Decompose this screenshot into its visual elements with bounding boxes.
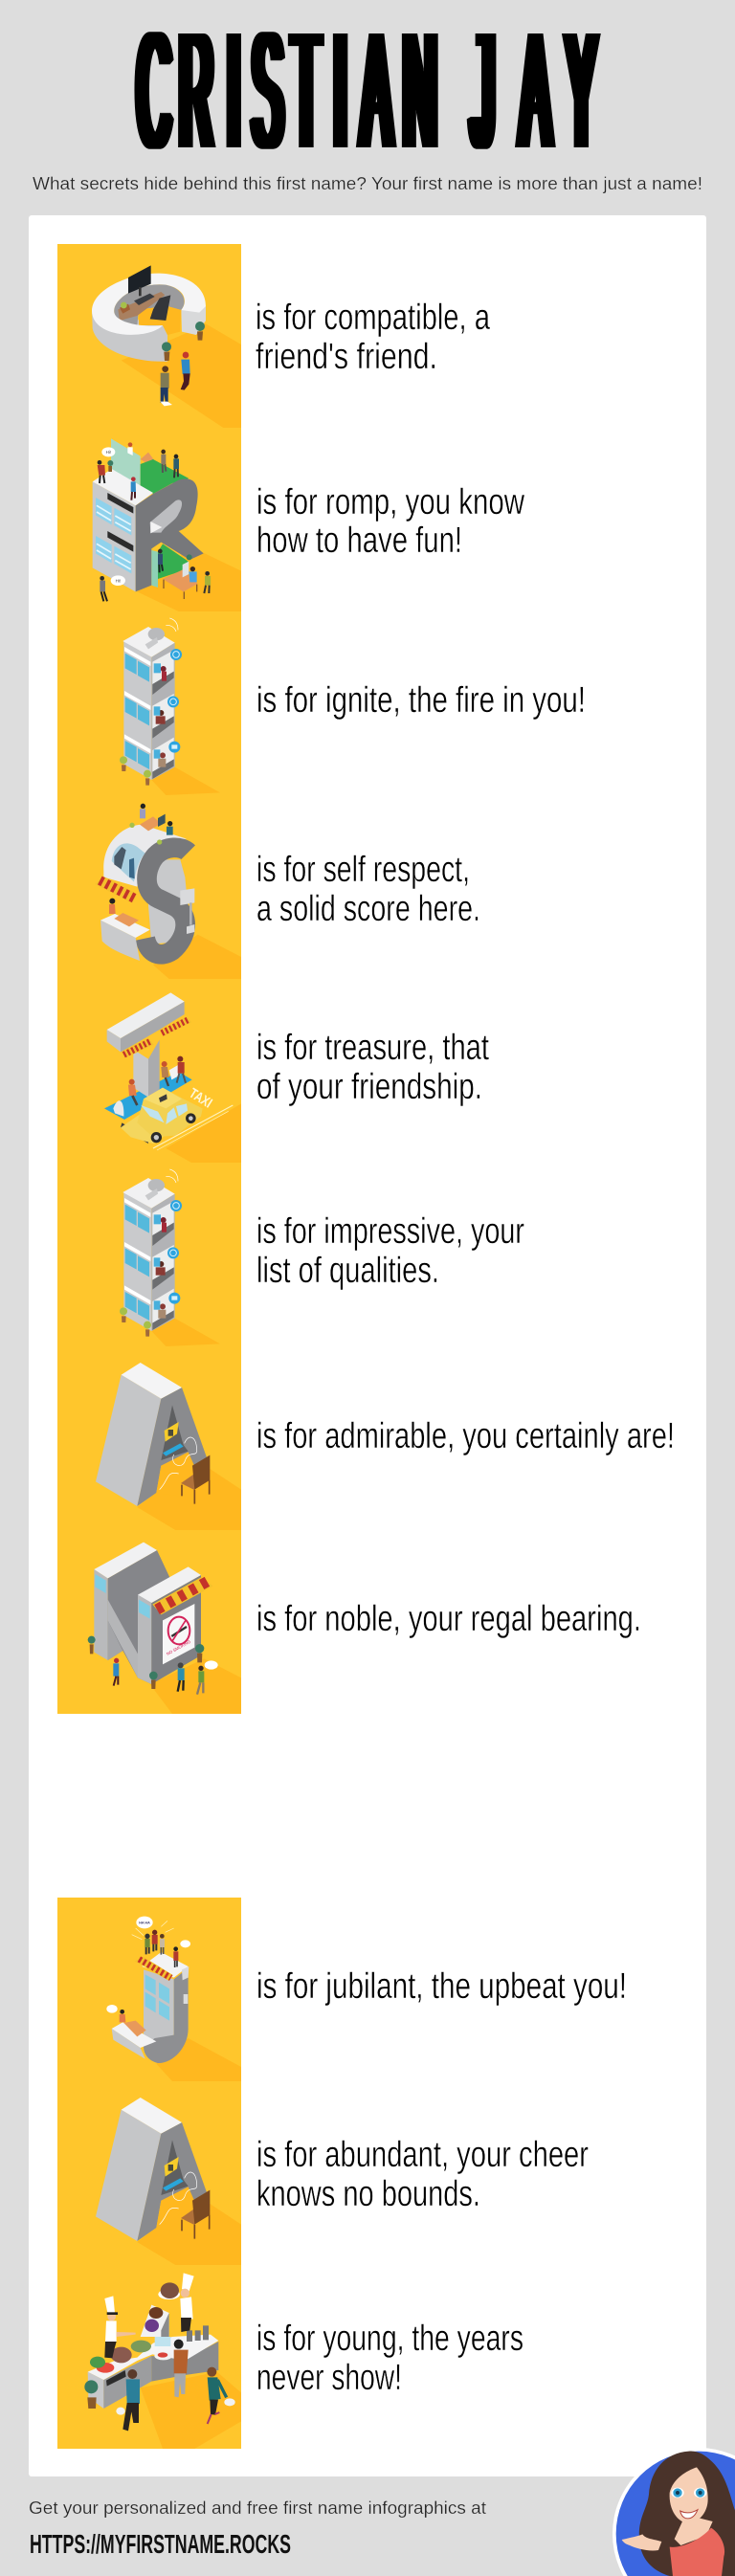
footer call to action: Get your personalized and free first name infographics at (29, 2498, 486, 2518)
text: I second line (256, 1211, 524, 1291)
text: T line: of your friendship. (256, 1067, 482, 1107)
text: A second line (256, 2135, 589, 2214)
illustration: letter J (57, 1898, 241, 2081)
text: I second line: is for impressive, your (256, 1211, 524, 1252)
text: S line: a solid score here. (256, 889, 480, 929)
text: A second line: knows no bounds. (256, 2174, 480, 2214)
text: A second line: is for abundant, your cheer (256, 2135, 589, 2175)
text: T line: is for treasure, that (256, 1028, 489, 1068)
text: C line: is for compatible, a (256, 298, 491, 338)
text: R line: is for romp, you know (256, 482, 524, 522)
text: Y line: is for young, the years (256, 2319, 523, 2359)
illustration: letter J: HA HA (139, 1921, 150, 1924)
text: Y line (256, 2319, 523, 2398)
illustration: letter Y (57, 2265, 241, 2449)
text: Y line: never show! (256, 2358, 402, 2398)
text: R line: how to have fun! (256, 521, 462, 561)
text: S line (256, 850, 480, 929)
illustration: letter R: Hi! (116, 578, 121, 583)
illustration: letter R (57, 428, 241, 611)
illustration: letter N: NO SMOKING (166, 1639, 192, 1656)
illustration: letter T: TAXI (187, 1085, 215, 1111)
text: R line (256, 482, 524, 561)
illustration: letter R: Hi! (106, 450, 111, 455)
illustration: letter A (57, 1346, 241, 1530)
illustration: letter I (second) (57, 1163, 241, 1346)
illustration: letter S (57, 795, 241, 979)
title: CRISTIAN JAY (138, 0, 596, 183)
illustration: letter T (57, 979, 241, 1163)
footer url: HTTPS://MYFIRSTNAME.ROCKS (30, 2529, 291, 2559)
text: J line: is for jubilant, the upbeat you! (256, 1966, 627, 2007)
text: S line: is for self respect, (256, 850, 470, 890)
illustration: letter N (57, 1530, 241, 1714)
text: I second line: list of qualities. (256, 1251, 439, 1291)
text: C line (256, 298, 491, 377)
subtitle: What secrets hide behind this first name? Your first name is more than just a name! (33, 174, 702, 193)
text: I line: is for ignite, the fire in you! (256, 680, 586, 721)
illustration: letter C (57, 244, 241, 428)
avatar: woman in circle (612, 2448, 735, 2576)
illustration: letter I (57, 611, 241, 795)
text: C line: friend's friend. (256, 337, 437, 377)
text: T line (256, 1028, 489, 1107)
illustration: letter A (second) (57, 2081, 241, 2265)
